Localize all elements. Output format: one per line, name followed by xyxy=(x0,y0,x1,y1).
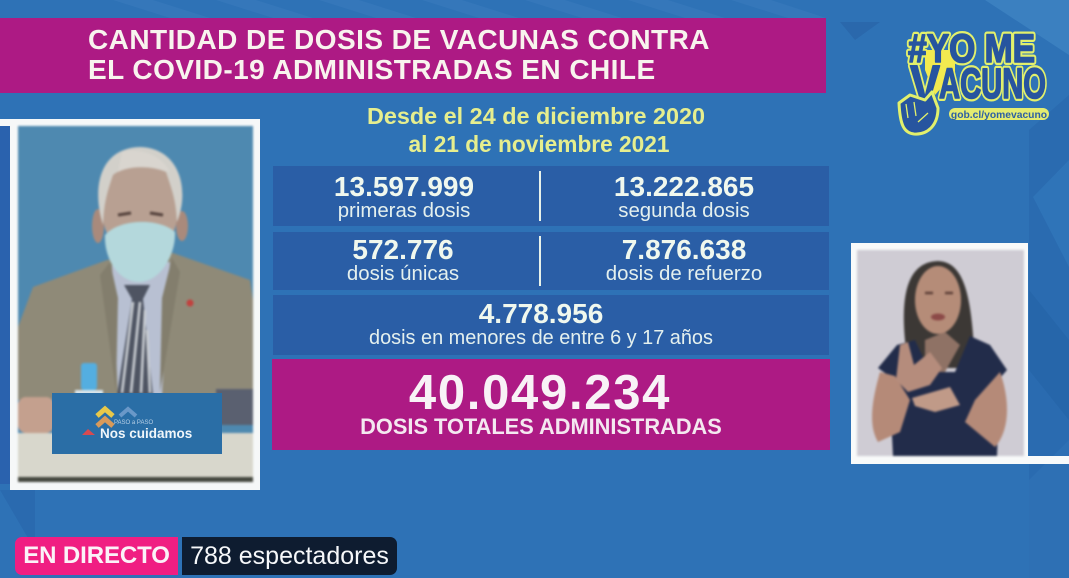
stat: dosis unicas: 572.776 xyxy=(352,234,454,265)
stat: dosis unicas xyxy=(347,234,459,285)
desk sign: Nos cuidamos xyxy=(52,393,222,454)
stat: segunda dosis: segunda dosis xyxy=(618,200,750,222)
logo outline layer xyxy=(908,27,1046,116)
sign text: Nos cuidamos xyxy=(100,426,192,441)
total number: 40.049.234 xyxy=(409,366,671,420)
stat: segunda dosis: 13.222.865 xyxy=(614,171,754,202)
date range subtitle: al 21 de noviembre 2021 xyxy=(408,130,670,156)
panel: doses row 3 xyxy=(273,295,829,355)
panel: doses row 1 xyxy=(273,166,829,226)
title text: CANTIDAD DE DOSIS DE VACUNAS CONTRA xyxy=(88,24,710,55)
logo outline layer: #YO ME xyxy=(908,27,1035,71)
viewers badge xyxy=(182,537,397,575)
photo panel: minister xyxy=(0,119,260,490)
logo letter V: V xyxy=(910,53,940,116)
date range subtitle: Desde el 24 de diciembre 2020 xyxy=(367,103,705,129)
stat: dosis unicas: dosis únicas xyxy=(347,263,459,285)
stat: primeras dosis: 13.597.999 xyxy=(334,171,474,202)
stat: segunda dosis xyxy=(614,171,754,222)
stat: dosis en menores: dosis en menores de entre 6 y 17 años xyxy=(369,327,713,349)
logo: yo me vacuno xyxy=(898,27,1049,136)
divider row 1 xyxy=(539,171,541,221)
logo outline layer: V xyxy=(910,53,940,116)
stat: dosis en menores: 4.778.956 xyxy=(479,298,603,329)
stat: dosis de refuerzo: 7.876.638 xyxy=(622,234,746,265)
sign logo xyxy=(82,406,138,435)
photo panel: sign language interpreter xyxy=(851,243,1069,464)
logo url pill: gob.cl/yomevacuno xyxy=(951,110,1047,121)
icon: hand xyxy=(899,92,938,134)
viewers badge: 788 espectadores xyxy=(190,542,389,570)
title text: EL COVID-19 ADMINISTRADAS EN CHILE xyxy=(88,54,656,84)
total label: DOSIS TOTALES ADMINISTRADAS xyxy=(360,414,722,439)
logo yellow fill xyxy=(925,50,955,95)
date range subtitle xyxy=(367,103,705,156)
title banner xyxy=(0,18,826,93)
live badge xyxy=(15,537,178,575)
logo line one: #YO ME xyxy=(908,27,1035,71)
divider row 2 xyxy=(539,236,541,286)
panel: doses row 2 xyxy=(273,232,829,290)
stat: dosis en menores xyxy=(369,298,713,349)
title text xyxy=(88,24,710,84)
stat: primeras dosis xyxy=(334,171,474,222)
panel: total doses xyxy=(272,359,830,450)
stat: dosis de refuerzo: dosis de refuerzo xyxy=(606,263,762,285)
live badge: EN DIRECTO xyxy=(23,542,170,569)
sign tiny text: PASO a PASO xyxy=(114,420,153,426)
stat: primeras dosis: primeras dosis xyxy=(338,200,470,222)
stat: dosis de refuerzo xyxy=(606,234,762,285)
